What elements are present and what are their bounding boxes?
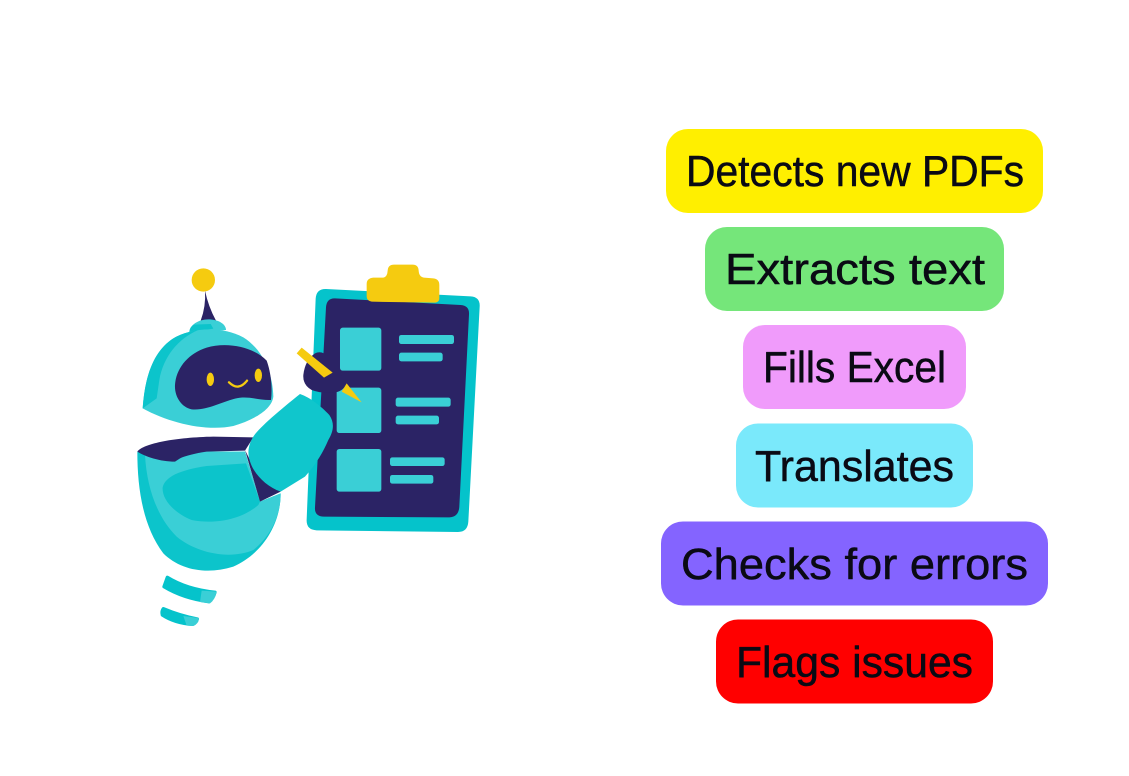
step: fills Excel: Fills Excel (763, 343, 946, 392)
icon: robot arm and pencil (248, 348, 362, 492)
step: checks for errors (661, 522, 1048, 606)
icon: robot head (143, 268, 273, 428)
step: flags issues (716, 620, 993, 704)
step: flags issues: Flags issues (736, 638, 973, 687)
list of automation steps (661, 129, 1048, 704)
step: translates: Translates (755, 442, 954, 491)
step: checks for errors: Checks for errors (681, 540, 1028, 589)
icon: robot body (137, 437, 281, 571)
step: extracts text: Extracts text (725, 245, 985, 294)
illustration: robot with clipboard (137, 265, 480, 626)
icon: clipboard (307, 265, 480, 532)
icon: hover swooshes (162, 577, 217, 626)
step: detects new PDFs (666, 129, 1043, 213)
step: detects new PDFs: Detects new PDFs (686, 147, 1024, 196)
step: fills Excel (743, 325, 966, 409)
step: translates (736, 424, 973, 508)
step: extracts text (705, 227, 1004, 311)
